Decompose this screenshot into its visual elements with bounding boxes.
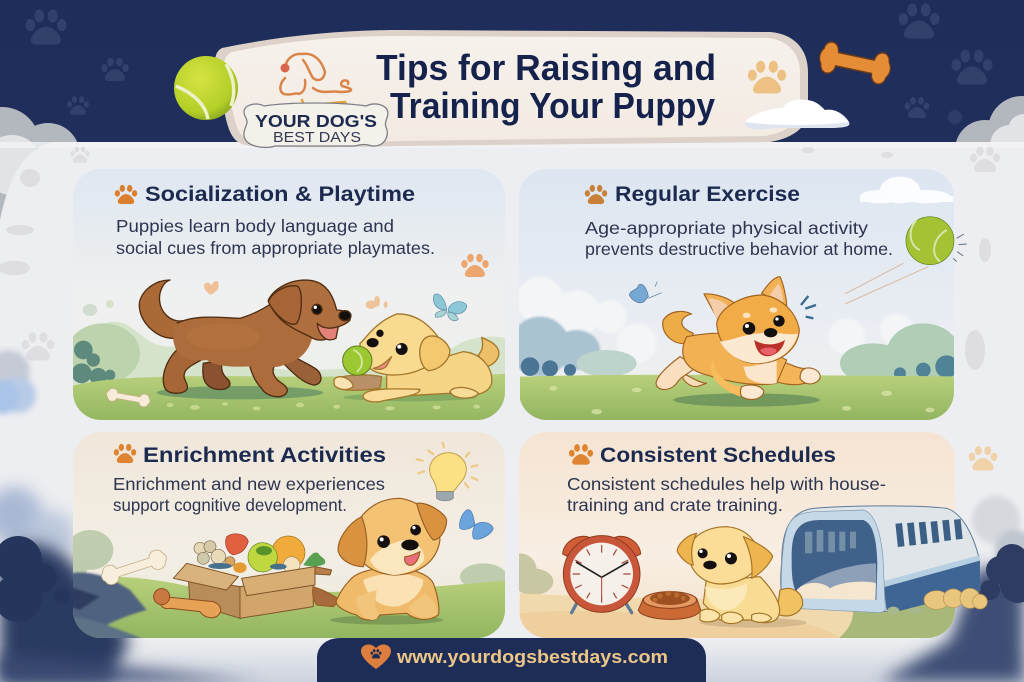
character: box	[173, 563, 332, 618]
icon: heart	[204, 281, 219, 295]
heading: Enrichment Activities	[143, 443, 386, 467]
scene: two puppies playing	[67, 254, 510, 427]
body text line 2: training and crate training.	[567, 495, 783, 515]
icon: rope toy	[154, 589, 221, 618]
icon: butterfly	[433, 294, 467, 321]
bone badge	[244, 103, 388, 147]
body text: Enrichment and new experiences	[113, 474, 385, 494]
heading: Socialization & Playtime	[145, 182, 415, 206]
panel: socialization and playtime	[67, 169, 510, 427]
scene: puppy with clock	[503, 536, 980, 640]
scene: puppy with toy box	[48, 443, 510, 643]
logo line 2: BEST DAYS	[273, 130, 361, 146]
icon: butterfly	[629, 282, 662, 303]
scene: crate and rocks	[677, 506, 987, 624]
character: golden puppy	[677, 527, 803, 624]
character: fluffy puppy	[313, 498, 447, 620]
icon: food bowl	[638, 591, 701, 619]
character: brown puppy	[139, 280, 351, 397]
title text line 1: Tips for Raising and	[376, 47, 716, 88]
icon: banner paw	[748, 61, 786, 94]
title banner	[215, 30, 808, 147]
icon: butterfly	[460, 510, 493, 539]
icon: alarm clock	[563, 536, 641, 613]
panel: enrichment activities	[48, 432, 510, 643]
icon: bone	[101, 550, 167, 585]
icon: tennis ball	[174, 56, 238, 120]
icon: bone	[105, 388, 151, 408]
icon: paw marks	[366, 296, 388, 309]
title text line 2: Training Your Puppy	[390, 85, 715, 126]
scene: running shiba puppy	[510, 177, 980, 423]
logo line 1: YOUR DOG'S	[255, 111, 377, 131]
body text: Age-appropriate physical activity	[585, 218, 868, 238]
icon: speed lines	[845, 263, 928, 304]
body text line 2: support cognitive development.	[113, 495, 347, 515]
panel: consistent schedules	[503, 432, 987, 640]
body text line 2: prevents destructive behavior at home.	[585, 239, 893, 259]
icon: rocks	[924, 588, 987, 609]
toys in the box	[194, 534, 325, 573]
body text line 2: social cues from appropriate playmates.	[116, 238, 435, 258]
icon: orange paw	[461, 254, 489, 277]
icon: excitement marks	[801, 296, 816, 318]
icon: dog crate	[781, 506, 980, 613]
clouds behind the pale sheet	[0, 96, 1024, 235]
character: golden puppy with ball	[334, 314, 499, 402]
footer bar	[317, 638, 706, 682]
bottom band	[0, 638, 1024, 682]
panel: regular exercise	[510, 169, 980, 423]
heading: Consistent Schedules	[600, 443, 836, 467]
footer url: www.yourdogsbestdays.com	[396, 646, 668, 667]
icon: cloud	[745, 100, 849, 130]
logo: your dogs best days	[244, 54, 388, 147]
icon: tennis ball	[906, 217, 967, 265]
icon: biscuit bone	[817, 40, 893, 86]
character: shiba puppy	[656, 277, 820, 399]
icon: light bulb	[417, 443, 477, 501]
heading: Regular Exercise	[615, 182, 800, 206]
body text: Consistent schedules help with house-	[567, 474, 886, 494]
icon: line dog	[280, 54, 351, 108]
body text: Puppies learn body language and	[116, 216, 394, 236]
icon: heart paw	[361, 644, 391, 669]
side clouds	[0, 350, 36, 414]
